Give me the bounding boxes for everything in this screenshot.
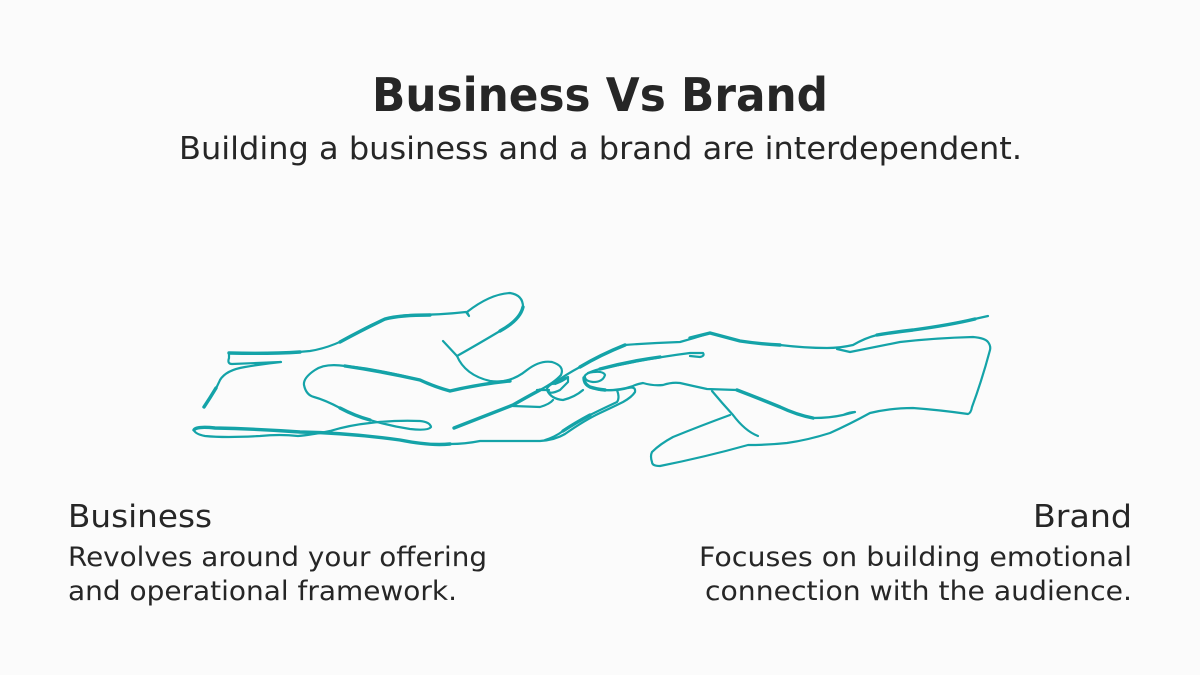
left hand: thumb base and index finger: [443, 341, 562, 428]
right hand: thumb crease: [712, 391, 758, 436]
brand label: Brand: [1033, 499, 1132, 535]
subtitle: Building a business and a brand are interdependent.: [179, 131, 1022, 167]
title: Business Vs Brand: [372, 68, 828, 122]
brand description: Focuses on building emotional: [699, 542, 1132, 573]
thicker brush emphasis on heavy stroke sections: [194, 307, 975, 444]
fingertip and nail details: [513, 372, 605, 407]
business description: and operational framework.: [68, 576, 457, 607]
business label: Business: [68, 499, 212, 535]
right hand: lower finger and palm edge: [587, 383, 855, 418]
business description: [68, 542, 487, 607]
left hand: second lower finger line: [545, 390, 618, 440]
brand description: [699, 542, 1132, 607]
left hand: palm and lower outline: [194, 353, 704, 444]
brand description: connection with the audience.: [705, 576, 1132, 607]
left hand: wrist, back of hand and thumb: [204, 293, 523, 407]
illustration: two reaching hands line art: [194, 293, 990, 466]
right hand: top of hand and forearm: [553, 316, 988, 384]
right hand: forearm end and thumb: [651, 337, 990, 466]
business description: Revolves around your offering: [68, 542, 487, 573]
